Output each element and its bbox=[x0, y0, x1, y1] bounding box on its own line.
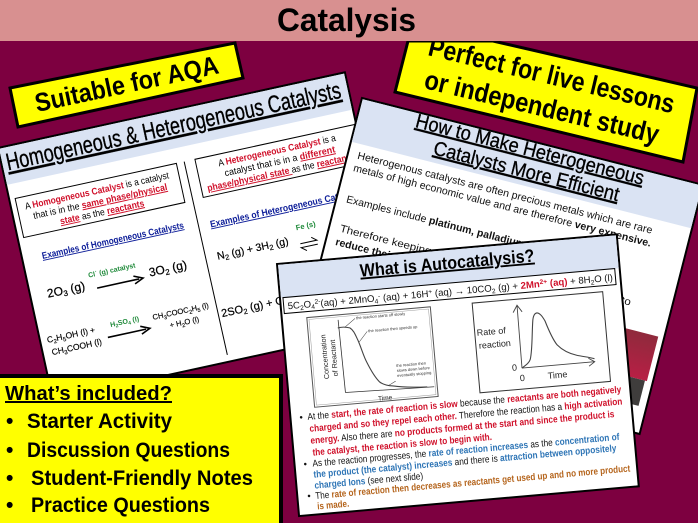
definition: heterogeneous catalyst: catalyst that is in a different bbox=[224, 144, 337, 179]
equation: esterification: 2 bbox=[53, 339, 58, 345]
equation: esterification: 3 bbox=[64, 350, 69, 356]
panel: what's included bbox=[0, 376, 281, 523]
equation: esterification: OH (l) + bbox=[64, 325, 96, 341]
equation box: (aq) bbox=[547, 277, 568, 289]
definition: homogeneous catalyst: that is in the same phase/physical bbox=[32, 182, 168, 222]
equation: esterification: (l) bbox=[199, 301, 210, 312]
included items list: Student-Friendly Notes bbox=[31, 467, 253, 490]
body text: Therefore keeping the amount used to a minimum helps to bbox=[339, 223, 632, 309]
equation: esterification: H bbox=[55, 332, 63, 343]
included items list bbox=[6, 410, 253, 517]
equation box: + 8H bbox=[567, 275, 591, 288]
equation: ozone decomposition: 3 bbox=[63, 288, 69, 298]
explanatory bullet points: • bbox=[299, 412, 303, 424]
equation: esterification bbox=[46, 300, 213, 360]
explanatory bullet points: At the start, the rate of reaction is slow because the reactants are both negatively bbox=[307, 384, 622, 423]
equation: ozone decomposition: 2 bbox=[164, 267, 171, 277]
equation: esterification: 5 bbox=[197, 308, 201, 314]
definition: heterogeneous catalyst: phase/physical state as the reactants bbox=[206, 151, 355, 194]
explanatory bullet points: The rate of reaction then decreases as reactants get used up and no more product bbox=[315, 463, 631, 502]
equation: contact process: 2SO bbox=[220, 304, 244, 320]
explanatory bullet points: charged and so they repel each other. Therefore the reaction has a high activation bbox=[309, 396, 623, 435]
definition: homogeneous catalyst bbox=[15, 163, 185, 238]
graph: concentration of reactant against time bbox=[307, 307, 438, 408]
equation: esterification: + H bbox=[169, 319, 182, 330]
graph: concentration of reactant against time: Concentration bbox=[318, 334, 331, 379]
slide heading: What is Autocatalysis? bbox=[359, 246, 535, 281]
slide: homogeneous and heterogeneous catalysts bbox=[0, 72, 400, 400]
explanatory bullet points: energy. Also there are no products formed at the start and since the product is bbox=[310, 409, 615, 447]
explanatory bullet points: the catalyst, the reaction is slow to begin with. bbox=[312, 432, 492, 459]
slide: how to make heterogeneous catalysts more efficient bbox=[299, 96, 698, 434]
examples heading: heterogeneous: Examples of Heterogeneous Catalysts bbox=[209, 187, 363, 230]
equation: Haber process: (g) bbox=[272, 235, 290, 251]
body text bbox=[333, 150, 656, 323]
graph: concentration of reactant against time: eventually stopping bbox=[397, 370, 432, 378]
equation box: 2- bbox=[314, 298, 321, 306]
body text: Examples include platinum, palladium and rhodium. bbox=[345, 193, 593, 268]
explanatory bullet points: • bbox=[303, 459, 307, 470]
examples heading: homogeneous: Examples of Homogeneous Catalysts bbox=[41, 220, 185, 262]
definition: heterogeneous catalyst bbox=[195, 124, 363, 197]
slide heading: How to Make Heterogeneous bbox=[413, 110, 646, 190]
equation box: O bbox=[303, 299, 312, 311]
equation: ozone decomposition: 2O bbox=[46, 284, 64, 301]
equation: esterification: CH bbox=[152, 311, 164, 322]
header bar with title: Catalysis bbox=[277, 2, 416, 38]
equation: ozone decomposition: (g) bbox=[168, 258, 188, 275]
equation: ozone decomposition bbox=[44, 251, 188, 303]
equation: Haber process bbox=[214, 219, 321, 270]
equation: esterification: 2 bbox=[182, 323, 186, 329]
equation: contact process: 2 bbox=[243, 307, 249, 316]
slide: what is autocatalysis bbox=[277, 234, 639, 516]
graph: concentration of reactant against time: the reaction then bbox=[396, 360, 426, 368]
equation: contact process: (g) + O bbox=[246, 295, 286, 314]
graph: concentration of reactant against time: Time bbox=[378, 394, 393, 403]
equation: esterification: COOC bbox=[165, 305, 190, 319]
equation box: (g) + bbox=[495, 281, 521, 294]
banner: perfect for live lessons or independent study: or independent study bbox=[422, 65, 662, 149]
equation: ozone decomposition: 3O bbox=[148, 262, 166, 280]
definition: homogeneous catalyst: A Homogeneous Catalyst is a catalyst bbox=[24, 170, 170, 212]
equation box: (aq) + 2MnO bbox=[320, 294, 375, 309]
photo bbox=[528, 308, 658, 406]
equation: esterification: (l) bbox=[130, 316, 140, 325]
equation: ozone decomposition: Cl˙ (g) catalyst bbox=[87, 261, 137, 280]
equation box: - bbox=[378, 293, 380, 300]
graph: rate of reaction against time: 0 bbox=[519, 373, 525, 383]
equation box: 2+ bbox=[539, 279, 548, 286]
slide heading: Catalysts More Efficient bbox=[431, 138, 622, 206]
equation: ozone decomposition: (g) bbox=[66, 279, 86, 296]
equation: Haber process: 2 bbox=[224, 252, 230, 262]
equation: esterification: C bbox=[46, 334, 54, 345]
equation box: + bbox=[428, 289, 433, 296]
included items list: • bbox=[6, 494, 13, 517]
body text: metals of high economic value and are therefore very expensive. bbox=[352, 162, 652, 250]
graph: concentration of reactant against time: the reaction starts off slowly bbox=[356, 311, 405, 320]
equation box: 4 bbox=[311, 304, 316, 311]
equation box: (aq) → 10CO bbox=[432, 283, 492, 300]
equation: esterification: H bbox=[110, 321, 116, 329]
equation box: 2 bbox=[492, 288, 496, 295]
included items list: Practice Questions bbox=[31, 494, 210, 517]
equation: Haber process: N bbox=[216, 249, 226, 263]
equation: esterification: COOH (l) bbox=[66, 336, 103, 354]
equation box: 4 bbox=[374, 298, 379, 306]
definition: homogeneous catalyst: state as the reactants bbox=[59, 198, 145, 227]
graph: rate of reaction against time: 0 bbox=[512, 362, 517, 373]
graph: rate of reaction against time: Time bbox=[547, 369, 568, 381]
slide heading: Homogeneous & Heterogeneous Catalysts bbox=[4, 77, 343, 176]
included items list: Starter Activity bbox=[27, 410, 172, 433]
equation: esterification: O (l) bbox=[184, 315, 200, 327]
explanatory bullet points: As the reaction progresses, the rate of reaction increases as the concentration of bbox=[312, 432, 621, 470]
equation: esterification: CH bbox=[51, 345, 65, 357]
included items list: Discussion Questions bbox=[27, 439, 230, 462]
equation: esterification: 2 bbox=[115, 323, 119, 329]
equation box: O (l) bbox=[594, 273, 613, 285]
equation: esterification: 4 bbox=[128, 320, 132, 327]
banner: suitable for AQA: Suitable for AQA bbox=[32, 50, 221, 118]
included items list: • bbox=[6, 439, 13, 462]
equation: esterification: H bbox=[191, 303, 198, 313]
explanatory bullet points: the product (the catalyst) increases and there is attraction between oppositely bbox=[313, 443, 617, 481]
explanatory bullet points bbox=[299, 384, 632, 513]
equation box bbox=[283, 269, 616, 314]
explanatory bullet points: • bbox=[307, 491, 311, 502]
definition: heterogeneous catalyst: A Heterogeneous Catalyst is a bbox=[217, 133, 337, 169]
graph: rate of reaction against time: Rate of bbox=[476, 325, 507, 338]
equation box: (aq) + 16H bbox=[380, 289, 429, 304]
equation: esterification: 3 bbox=[163, 315, 168, 321]
banner: perfect for live lessons or independent study bbox=[395, 32, 697, 162]
explanatory bullet points: is made. bbox=[317, 499, 350, 512]
explanatory bullet points: charged Ions (see next slide) bbox=[314, 471, 424, 492]
included items list: • bbox=[6, 410, 13, 433]
body text: Heterogenous catalysts are often precious metals which are rare bbox=[356, 150, 654, 237]
equation box: 2Mn bbox=[520, 279, 540, 292]
equation: esterification: SO bbox=[117, 318, 129, 327]
body text: reduce their cost. bbox=[334, 236, 422, 269]
included items list: • bbox=[6, 467, 13, 490]
equation box: 2 bbox=[300, 305, 305, 312]
graph: concentration of reactant against time: of Reactant bbox=[328, 339, 340, 377]
panel heading: What’s included? bbox=[5, 383, 172, 405]
equation box: 5C bbox=[287, 300, 300, 312]
graph: rate of reaction against time: reaction bbox=[478, 338, 511, 351]
graph: concentration of reactant against time: the reaction then speeds up bbox=[368, 324, 418, 333]
equation: esterification: 5 bbox=[62, 337, 68, 343]
equation: Haber process: (g) + 3H bbox=[227, 240, 270, 260]
equation: Haber process: 2 bbox=[268, 243, 274, 252]
equation: Haber process: Fe (s) bbox=[295, 219, 317, 232]
graph: concentration of reactant against time: slows down before bbox=[397, 365, 431, 373]
header bar with title bbox=[0, 0, 698, 41]
graph: rate of reaction against time bbox=[472, 292, 610, 393]
equation box: 2 bbox=[591, 279, 595, 287]
equation: esterification: 2 bbox=[189, 309, 193, 316]
